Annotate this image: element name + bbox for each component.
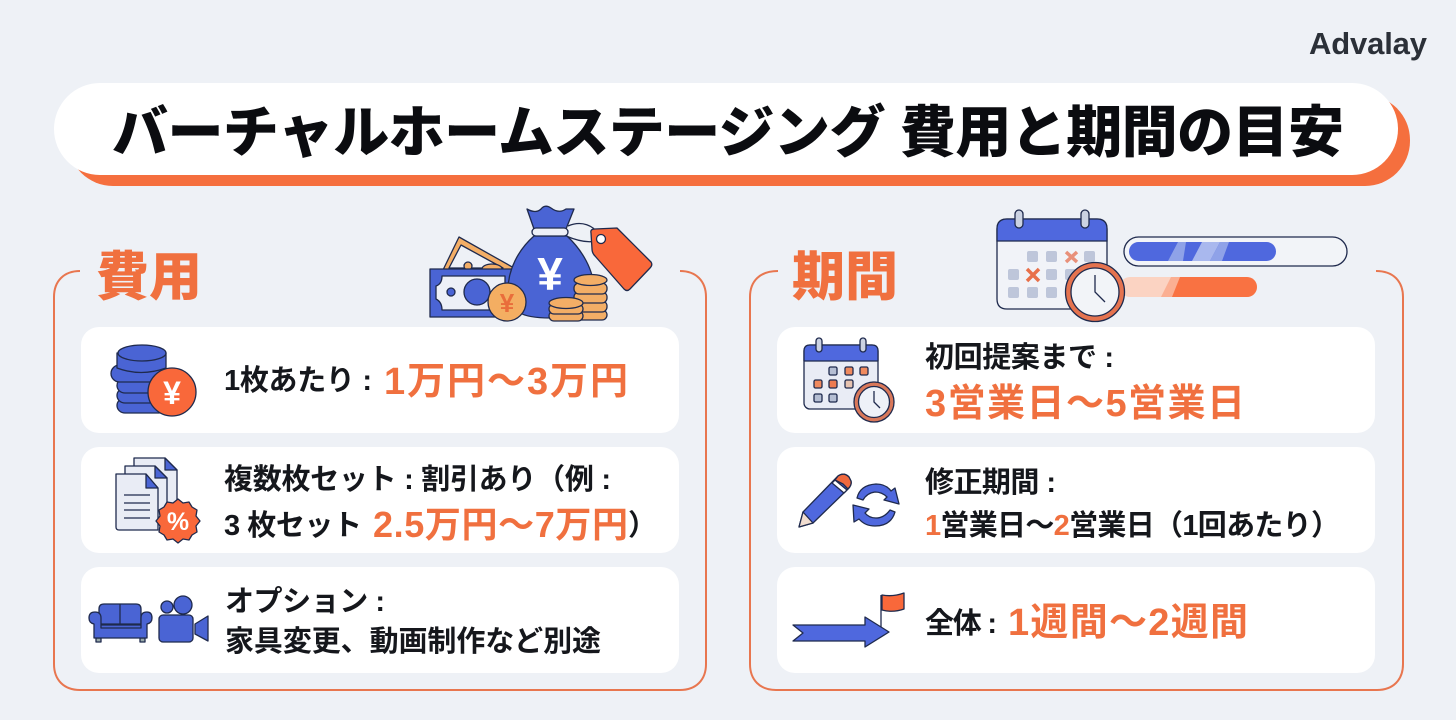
panel: cost bbox=[54, 206, 706, 690]
icon: sofa and video camera bbox=[89, 596, 208, 642]
icon: money bag, bills, coins and price tag bbox=[430, 206, 652, 321]
icon: calendar with clock bbox=[804, 338, 894, 422]
icon: pencil and refresh arrows bbox=[799, 474, 899, 527]
panel: cost: ¥ bbox=[537, 248, 563, 300]
row text: 複数枚セット : 割引あり（例 : bbox=[224, 463, 611, 496]
value: 2.5万円〜7万円 bbox=[373, 504, 628, 545]
icon: documents with percent badge bbox=[116, 458, 200, 543]
heading: duration: 期間 bbox=[792, 248, 898, 307]
title banner bbox=[54, 83, 1410, 186]
title text: バーチャルホームステージング 費用と期間の目安 bbox=[112, 101, 1344, 164]
icon: arrow with flag bbox=[793, 593, 904, 647]
row: price per image bbox=[81, 327, 679, 433]
row: options bbox=[81, 567, 679, 673]
icon: coin stack with yen bbox=[111, 345, 196, 416]
row: multi-image set: % bbox=[167, 508, 189, 536]
row text: 1枚あたり : bbox=[224, 364, 372, 397]
row text: 初回提案まで : bbox=[925, 341, 1114, 374]
row text: 修正期間 : bbox=[925, 466, 1056, 499]
row: overall bbox=[777, 567, 1375, 673]
heading: cost: 費用 bbox=[96, 248, 202, 307]
row text: オプション : bbox=[225, 585, 385, 618]
value: 1週間〜2週間 bbox=[1008, 602, 1248, 644]
row: first proposal bbox=[777, 327, 1375, 433]
icon: calendar, clock and progress bars bbox=[997, 210, 1347, 322]
row: revision bbox=[777, 447, 1375, 553]
value: 3営業日〜5営業日 bbox=[925, 383, 1245, 425]
panel: duration bbox=[750, 210, 1403, 690]
logo: Advalay: Advalay bbox=[1309, 26, 1428, 61]
row: price per image: ¥ bbox=[163, 375, 181, 411]
row text: 全体 : bbox=[925, 607, 997, 640]
row: multi-image set bbox=[81, 447, 679, 553]
value: 1万円〜3万円 bbox=[384, 361, 628, 403]
row text: 家具変更、動画制作など別途 bbox=[225, 625, 601, 658]
panel: cost: ¥ bbox=[500, 288, 515, 318]
row text: 1営業日〜2営業日（1回あたり） bbox=[925, 509, 1340, 542]
row text: ） bbox=[628, 510, 657, 542]
row text: 3 枚セット bbox=[224, 509, 362, 542]
